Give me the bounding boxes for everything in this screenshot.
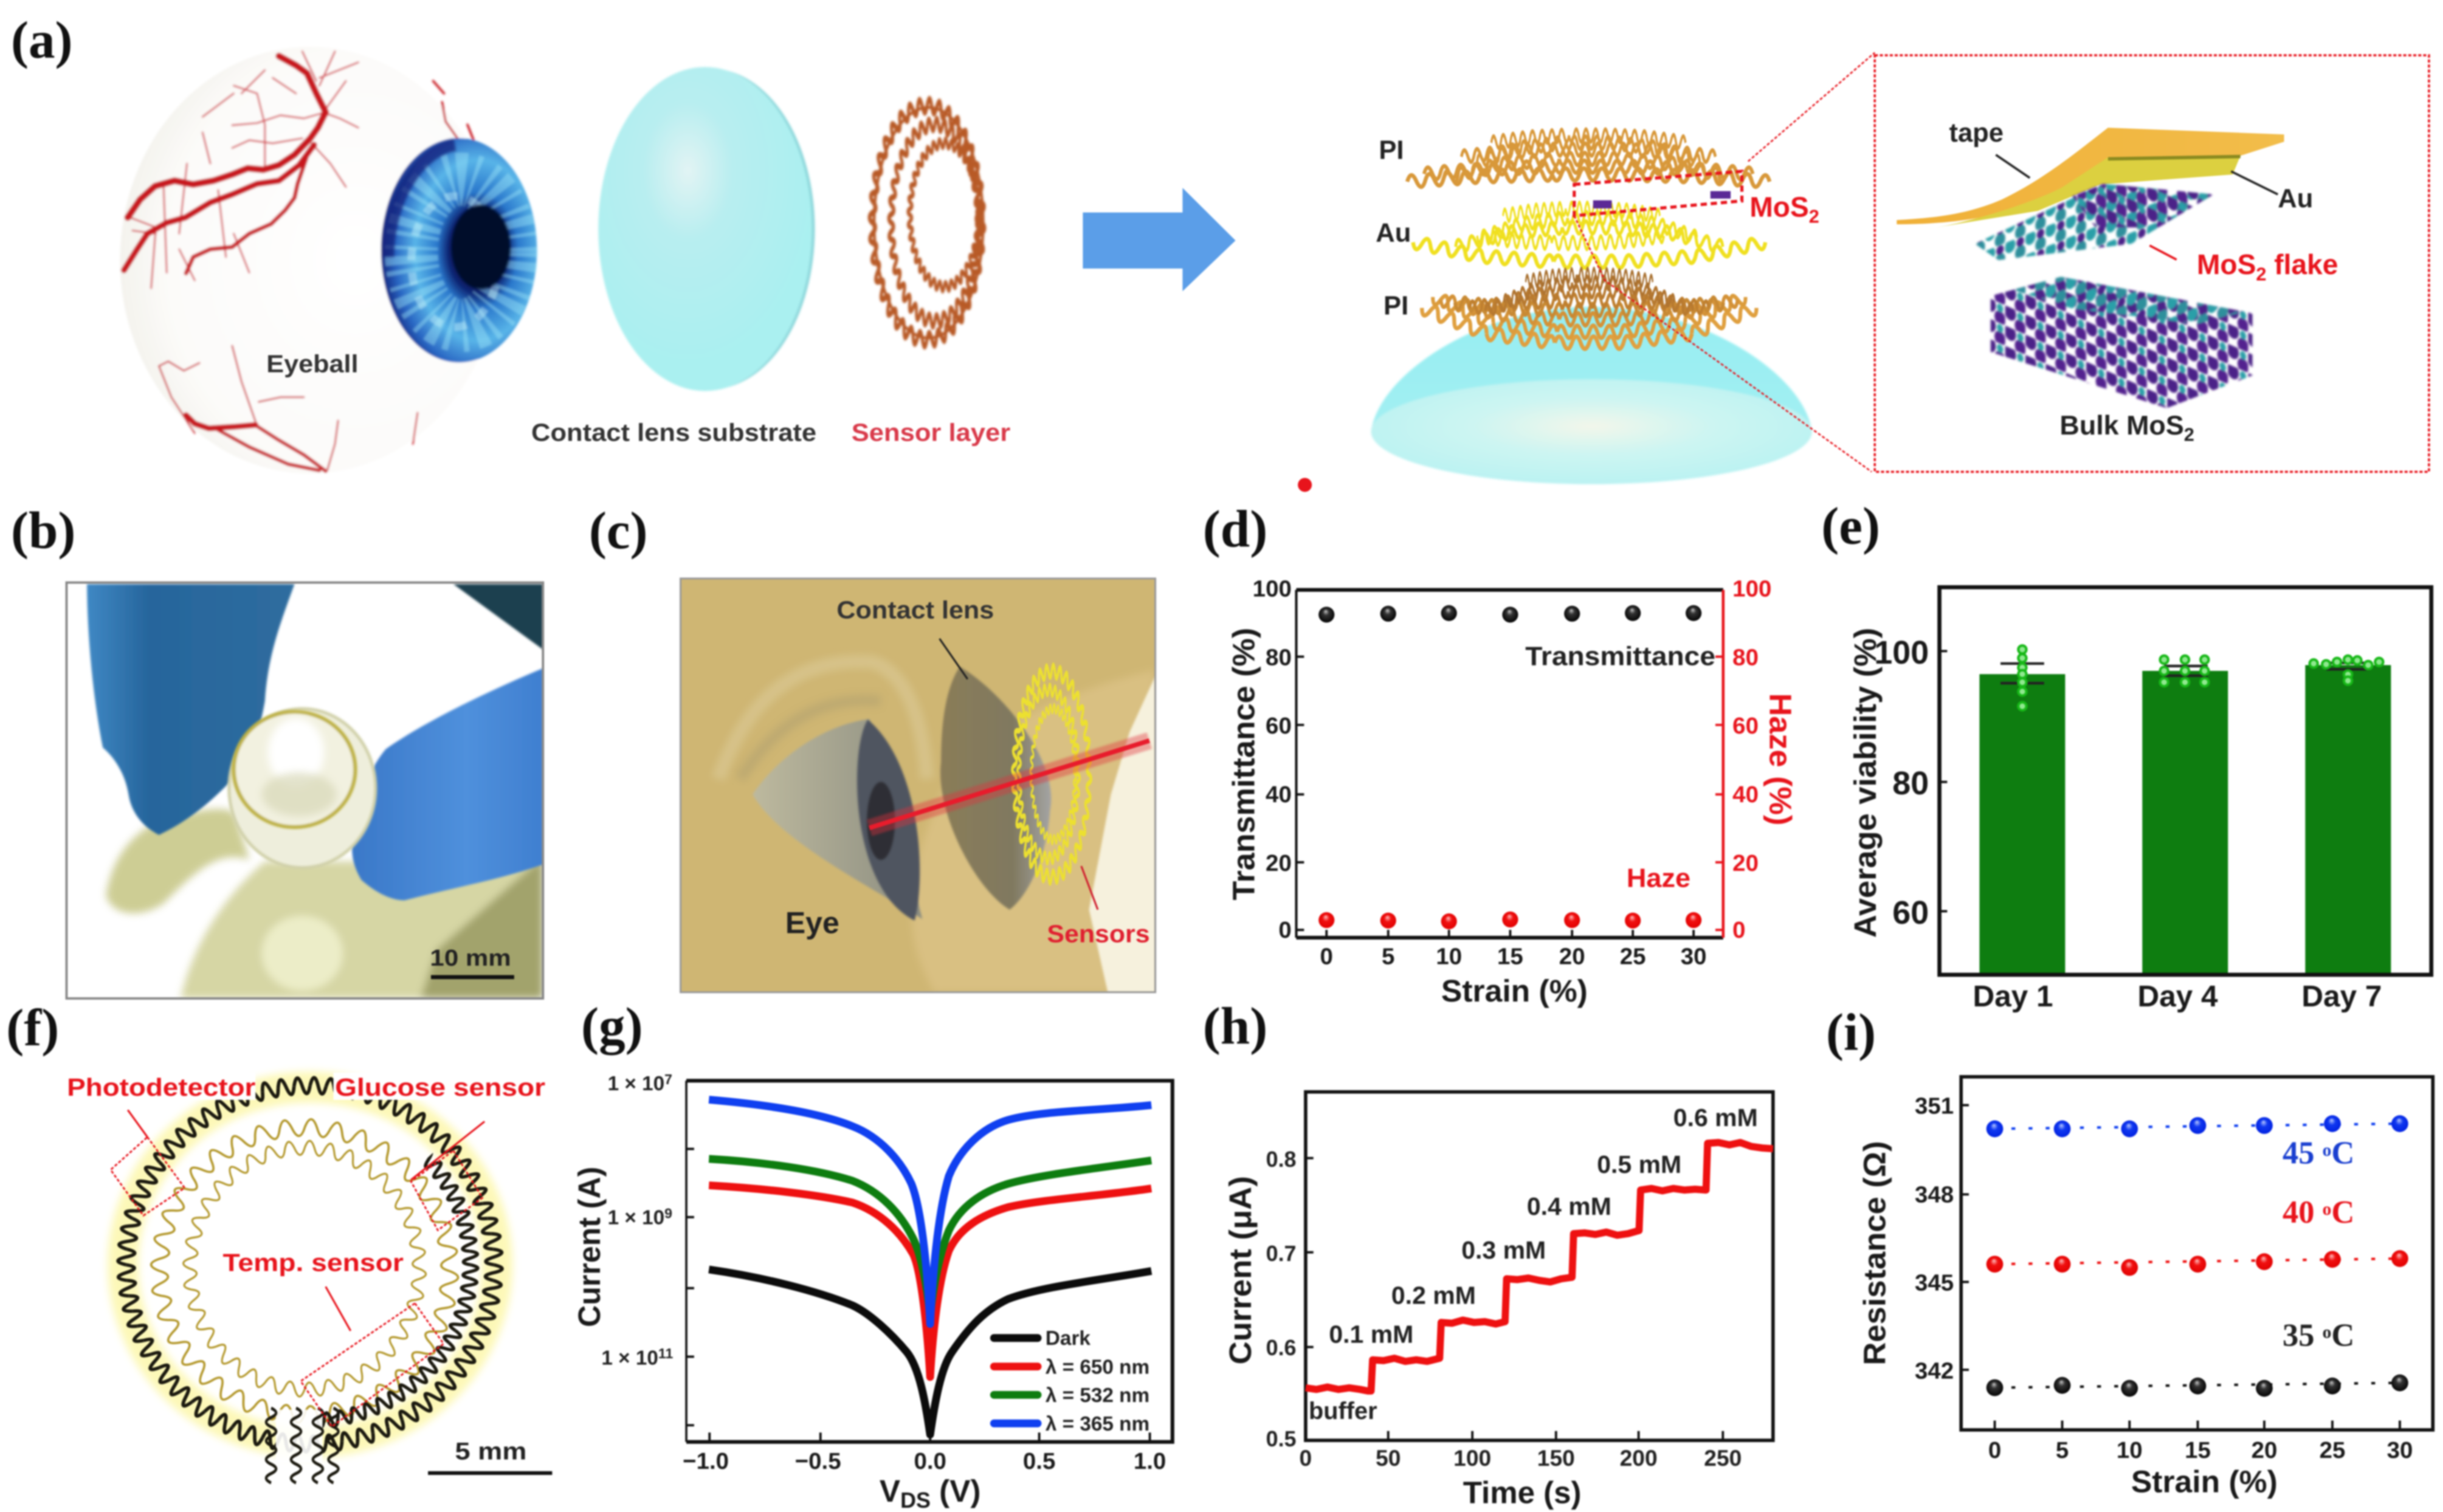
left axis labels: 40 — [1266, 782, 1292, 808]
chart frame and ticks — [1940, 587, 2431, 975]
concentration labels: 0.1 mM — [1329, 1320, 1413, 1348]
label: Contact lens: Contact lens — [836, 596, 994, 624]
right axis labels: 80 — [1732, 644, 1759, 670]
panel label i: (i) — [1826, 1003, 1876, 1062]
legend: λ = 650 nm — [1046, 1356, 1149, 1379]
illustration: top PI serpentine layer — [1407, 129, 1770, 188]
y axis labels: 11 — [658, 1345, 673, 1361]
MoS2 sensing location box — [1574, 171, 1742, 216]
illustration: serpentine sensor rings — [96, 1056, 524, 1483]
panel f: sensor layout — [6, 998, 552, 1483]
right axis labels: 60 — [1732, 713, 1759, 739]
y axis labels: 345 — [1915, 1270, 1954, 1296]
illustration: eyeball with veins — [120, 47, 537, 473]
label: Eye: Eye — [785, 905, 839, 940]
left axis labels: 60 — [1266, 713, 1292, 739]
label: MoS2 flake: MoS — [2197, 249, 2256, 280]
y axis labels: 100 — [1874, 634, 1929, 671]
panel b: lens photo — [11, 501, 543, 998]
label: Bulk MoS2: Bulk MoS — [2059, 410, 2184, 441]
label: Au layer: Au — [1376, 218, 1411, 247]
series: haze points — [1318, 912, 1701, 929]
chart frame and ticks — [1306, 1092, 1773, 1440]
y axis labels: 1 × 10 — [608, 1073, 664, 1095]
panel i: temperature sensor chart — [1826, 1003, 2433, 1499]
photo frame — [66, 583, 543, 998]
label: 35 C: 35 — [2283, 1318, 2315, 1353]
label: Photodetector: Photodetector — [67, 1073, 255, 1101]
axis title: Resistance: Resistance (Ω) — [1857, 1141, 1892, 1366]
x axis labels: 150 — [1537, 1445, 1575, 1471]
panel a: contact lens structure — [11, 10, 2429, 492]
panel label c: (c) — [589, 501, 648, 560]
y axis labels: 351 — [1915, 1093, 1954, 1119]
x axis labels: 50 — [1376, 1445, 1401, 1471]
category labels: Day 7 — [2301, 980, 2382, 1013]
axis title: VDS (V): V — [880, 1474, 900, 1508]
chart frame and ticks — [1961, 1077, 2433, 1430]
concentration labels — [1309, 1104, 1758, 1424]
axis title: VDS (V): DS — [900, 1488, 931, 1512]
axis title: Haze: Haze (%) — [1763, 693, 1798, 825]
label: Haze: Haze — [1627, 864, 1690, 893]
label: 5 mm: 5 mm — [455, 1438, 526, 1465]
left axis labels: 80 — [1266, 644, 1292, 670]
panel g: photodetector IV curves — [572, 996, 1173, 1512]
x axis labels: 20 — [2252, 1437, 2277, 1463]
left axis labels: 100 — [1253, 576, 1292, 602]
y axis labels: 342 — [1915, 1358, 1954, 1384]
legend: Dark — [1046, 1327, 1091, 1350]
MoS2 flake atoms — [1975, 184, 2214, 260]
x axis labels: 10 — [2117, 1437, 2143, 1463]
label: Glucose sensor: Glucose sensor — [335, 1073, 545, 1101]
y axis labels: 1 × 10 — [601, 1347, 658, 1369]
arrow: flake — [2149, 246, 2177, 259]
label: MoS2 flake: flake — [2266, 249, 2338, 280]
x axis labels: 200 — [1620, 1445, 1658, 1471]
error bars — [2000, 663, 2370, 683]
series: 45 C — [1986, 1115, 2408, 1137]
x axis labels: 5 — [2056, 1437, 2069, 1463]
x axis labels — [1320, 944, 1707, 970]
legend — [994, 1327, 1149, 1435]
y axis labels: 7 — [664, 1071, 672, 1087]
panel label a: (a) — [11, 10, 73, 69]
arrow: sensors — [1081, 866, 1098, 910]
panel e: viability bar chart — [1821, 497, 2431, 1013]
photo frame — [681, 579, 1156, 992]
x axis labels: 1.0 — [1134, 1448, 1166, 1474]
label: Eyeball: Eyeball — [266, 350, 359, 378]
label: Transmittance: Transmittance — [1525, 642, 1715, 671]
x axis labels: −0.5 — [795, 1448, 841, 1474]
y axis labels: 0.6 — [1266, 1336, 1297, 1360]
panel label e: (e) — [1821, 497, 1880, 555]
illustration: Au serpentine layer — [1412, 202, 1766, 268]
red dot — [1298, 478, 1312, 492]
series: transmittance points — [1318, 605, 1701, 622]
x axis labels: 15 — [2185, 1437, 2211, 1463]
category labels — [1973, 980, 2382, 1013]
trace: current steps — [1306, 1143, 1773, 1391]
label: Bulk MoS2: 2 — [2184, 424, 2194, 445]
illustration: hemispherical lens dome — [1371, 307, 1812, 484]
concentration labels: 0.2 mM — [1391, 1281, 1476, 1309]
bars — [1979, 665, 2391, 975]
label: 35 C: o — [2323, 1323, 2331, 1342]
right axis labels: 20 — [1732, 850, 1759, 876]
arrow: contact lens — [940, 639, 968, 679]
x axis labels — [1300, 1445, 1742, 1471]
axis title: Current (uA): Current (μA) — [1223, 1176, 1258, 1364]
label: tape: tape — [1949, 119, 2004, 148]
illustration: eye with lens and sensors — [681, 579, 1156, 992]
tape and Au film — [1897, 128, 2284, 227]
pointer lines — [128, 1110, 484, 1331]
axis title: Average viability: Average viability (%) — [1848, 628, 1883, 938]
left axis labels: 0 — [1278, 917, 1292, 943]
label: 40 C: o — [2323, 1200, 2331, 1219]
label: Sensor layer: Sensor layer — [852, 418, 1010, 446]
y axis labels: 0.8 — [1266, 1147, 1297, 1172]
panel label b: (b) — [11, 501, 75, 560]
right axis labels: 40 — [1732, 782, 1759, 808]
category labels: Day 1 — [1973, 980, 2053, 1013]
axis title: VDS (V): (V) — [931, 1474, 980, 1508]
x axis labels: 0 — [1300, 1445, 1312, 1471]
arrow: tape — [1996, 155, 2030, 178]
label: MoS2 flake: 2 — [2256, 263, 2266, 284]
label: Temp. sensor: Temp. sensor — [223, 1248, 404, 1276]
illustration: lower PI serpentine layer — [1420, 269, 1759, 349]
y axis labels — [1915, 1093, 1954, 1384]
axis title: Strain: Strain (%) — [1441, 974, 1588, 1008]
arrow: blue right arrow — [1083, 188, 1236, 291]
axis title: Time (s): Time (s) — [1463, 1475, 1582, 1510]
arrow: Au — [2231, 171, 2278, 194]
curves: dark and illuminated current — [709, 1100, 1151, 1435]
label: Contact lens substrate: Contact lens substrate — [531, 418, 816, 446]
label: PI top: PI — [1379, 136, 1404, 165]
x axis labels: 0.5 — [1023, 1448, 1055, 1474]
axis title: Strain: Strain (%) — [2131, 1464, 2278, 1499]
x axis labels: 5 — [1382, 944, 1394, 970]
label: 45 C: C — [2331, 1136, 2354, 1171]
concentration labels: 0.6 mM — [1673, 1104, 1758, 1132]
axis title: Current (A): Current (A) — [572, 1167, 607, 1327]
x axis labels: 30 — [2387, 1437, 2413, 1463]
photo: gloved fingers holding lens — [66, 583, 543, 998]
panel label d: (d) — [1203, 500, 1267, 558]
label: 45 C: 45 — [2283, 1136, 2315, 1171]
y axis labels: 348 — [1915, 1182, 1954, 1208]
x axis labels: −1.0 — [683, 1448, 729, 1474]
x axis labels: 15 — [1497, 944, 1523, 970]
x axis labels: 25 — [1620, 944, 1646, 970]
y axis labels — [601, 1071, 673, 1369]
series: 40 C — [1986, 1250, 2408, 1276]
concentration labels: 0.4 mM — [1527, 1192, 1611, 1220]
x axis labels: 20 — [1559, 944, 1585, 970]
legend: λ = 532 nm — [1046, 1384, 1149, 1407]
legend: λ = 365 nm — [1046, 1413, 1149, 1435]
x axis labels: 250 — [1704, 1445, 1742, 1471]
panel c: eye and contact lens render — [589, 501, 1156, 992]
right axis labels: 100 — [1732, 576, 1771, 602]
label: Sensors: Sensors — [1047, 920, 1150, 948]
inset box: exfoliation of MoS2 — [1875, 55, 2429, 472]
panel label h: (h) — [1203, 996, 1267, 1055]
label: 40 C: 40 — [2283, 1195, 2315, 1230]
label: 45 C: o — [2323, 1141, 2331, 1160]
right axis labels: 0 — [1732, 917, 1746, 943]
scale bar — [431, 975, 514, 979]
x axis labels — [1988, 1437, 2413, 1463]
label: PI bottom: PI — [1383, 292, 1408, 321]
label: 35 C: C — [2331, 1318, 2354, 1353]
y axis labels: 1 × 10 — [608, 1207, 664, 1229]
x axis labels: 30 — [1681, 944, 1707, 970]
x axis labels: 0 — [1320, 944, 1333, 970]
panel d: transmittance and haze chart — [1203, 500, 1798, 1008]
x axis labels: 0 — [1988, 1437, 2001, 1463]
label: MoS2: MoS — [1749, 191, 1809, 222]
y axis labels: 0.7 — [1266, 1242, 1297, 1266]
chart frame and ticks — [1297, 590, 1723, 938]
zoom connector lines — [1574, 53, 1875, 472]
x axis labels: 100 — [1453, 1445, 1491, 1471]
label: Au: Au — [2278, 184, 2313, 213]
sensor region outlines — [111, 1137, 483, 1427]
axis title: Transmittance: Transmittance (%) — [1226, 628, 1261, 900]
x axis labels: 25 — [2320, 1437, 2345, 1463]
label: 10 mm scale: 10 mm — [430, 945, 511, 971]
left axis labels: 20 — [1266, 850, 1292, 876]
bulk MoS2 crystal — [1991, 277, 2253, 408]
x axis labels: 0.0 — [914, 1448, 946, 1474]
x axis labels — [683, 1448, 1166, 1474]
category labels: Day 4 — [2137, 980, 2218, 1013]
y axis labels: 0.5 — [1266, 1427, 1297, 1451]
panel label g: (g) — [581, 996, 643, 1055]
concentration labels: 0.3 mM — [1461, 1236, 1546, 1264]
y axis labels: 9 — [664, 1205, 672, 1221]
left axis labels — [1253, 576, 1292, 943]
series: 35 C — [1986, 1375, 2408, 1397]
panel label f: (f) — [6, 998, 59, 1057]
y axis labels: 60 — [1892, 895, 1929, 931]
concentration labels: 0.5 mM — [1597, 1150, 1681, 1178]
scale bar — [428, 1471, 552, 1475]
panel h: glucose response chart — [1203, 996, 1773, 1510]
y axis labels: 80 — [1892, 765, 1929, 802]
y axis labels — [1874, 634, 1929, 931]
illustration: contact lens substrate — [598, 67, 815, 391]
concentration labels: buffer — [1309, 1398, 1377, 1424]
x axis labels: 10 — [1436, 944, 1462, 970]
scatter points — [2018, 645, 2383, 710]
y axis labels — [1266, 1147, 1297, 1451]
right axis labels — [1732, 576, 1771, 943]
label: 40 C: C — [2331, 1195, 2354, 1230]
chart frame and ticks — [686, 1081, 1173, 1442]
label: MoS2: 2 — [1809, 206, 1819, 227]
illustration: sensor layer rings — [855, 61, 999, 384]
